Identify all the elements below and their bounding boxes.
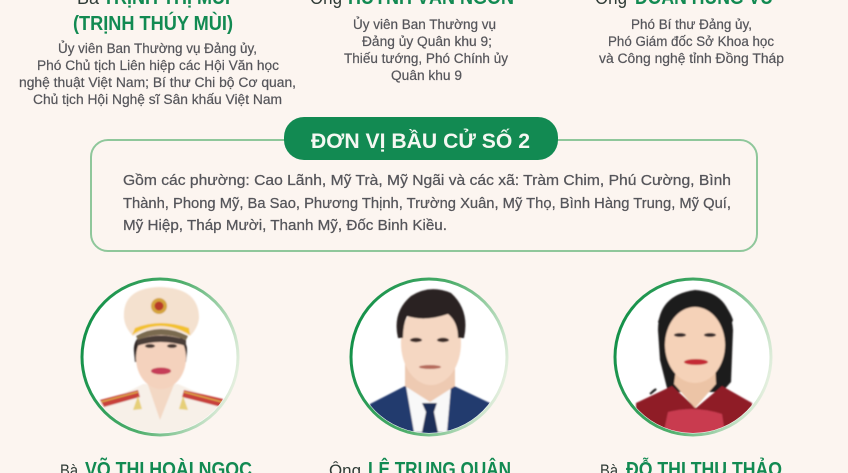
- portrait: Võ Thị Hoài Ngọc: [82, 279, 238, 440]
- name: Trịnh Thị Mùi: [73, 0, 233, 35]
- description: Đoàn Hùng Vũ: và Công nghệ tỉnh Đồng Tháp: [599, 51, 784, 66]
- description: Huỳnh Văn Ngón: Thiếu tướng, Phó Chính ủy: [344, 51, 508, 66]
- candidate block: Huỳnh Văn Ngón: [310, 0, 514, 83]
- description: Huỳnh Văn Ngón: Ủy viên Ban Thường vụ: [353, 17, 496, 32]
- description: Huỳnh Văn Ngón: [344, 17, 508, 83]
- text block: list of wards and communes: Gồm các phường: Cao Lãnh, Mỹ Trà, Mỹ Ngãi và các xã: Tràm Chim, Phú Cường, Bình: [123, 173, 731, 189]
- panel outline: [91, 140, 757, 251]
- name: Võ Thị Hoài Ngọc: [60, 457, 252, 473]
- description: Trịnh Thị Mùi: Ủy viên Ban Thường vụ Đảng ủy,: [58, 41, 257, 56]
- description: Đoàn Hùng Vũ: [599, 17, 784, 66]
- name: Lê Trung Quân: [329, 457, 511, 473]
- description: Huỳnh Văn Ngón: Đảng ủy Quân khu 9;: [362, 34, 492, 49]
- heading pill: đơn vị bầu cử số 2: [284, 117, 558, 160]
- text block: list of wards and communes: Thành, Phong Mỹ, Ba Sao, Phương Thịnh, Trường Xuân, Mỹ Thọ, Bình Hàng Trung, Mỹ Quí,: [123, 196, 731, 212]
- text block: list of wards and communes: [123, 173, 731, 234]
- description: Trịnh Thị Mùi: Chủ tịch Hội Nghệ sĩ Sân khấu Việt Nam: [33, 92, 282, 107]
- description: Trịnh Thị Mùi: [19, 41, 296, 107]
- name: Trịnh Thị Mùi: (TRỊNH THÚY MÙI): [73, 11, 233, 35]
- candidate block: Đoàn Hùng Vũ: [595, 0, 784, 66]
- portrait: Lê Trung Quân: [351, 279, 507, 440]
- heading pill: đơn vị bầu cử số 2: ĐƠN VỊ BẦU CỬ SỐ 2: [311, 129, 530, 153]
- portrait: Đỗ Thị Thu Thảo: [615, 279, 771, 440]
- description: Đoàn Hùng Vũ: Phó Giám đốc Sở Khoa học: [608, 34, 774, 49]
- description: Trịnh Thị Mùi: nghệ thuật Việt Nam; Bí thư Chi bộ Cơ quan,: [19, 75, 296, 90]
- text block: list of wards and communes: Mỹ Hiệp, Tháp Mười, Thanh Mỹ, Đốc Binh Kiều.: [123, 218, 447, 234]
- description: Trịnh Thị Mùi: Phó Chủ tịch Liên hiệp các Hội Văn học: [37, 58, 279, 73]
- name: Đỗ Thị Thu Thảo: [600, 457, 782, 473]
- description: Đoàn Hùng Vũ: Phó Bí thư Đảng ủy,: [631, 17, 752, 32]
- description: Huỳnh Văn Ngón: Quân khu 9: [391, 68, 462, 83]
- panel: electoral unit 2: [91, 117, 757, 251]
- candidate block: Trịnh Thị Mùi: [19, 0, 296, 107]
